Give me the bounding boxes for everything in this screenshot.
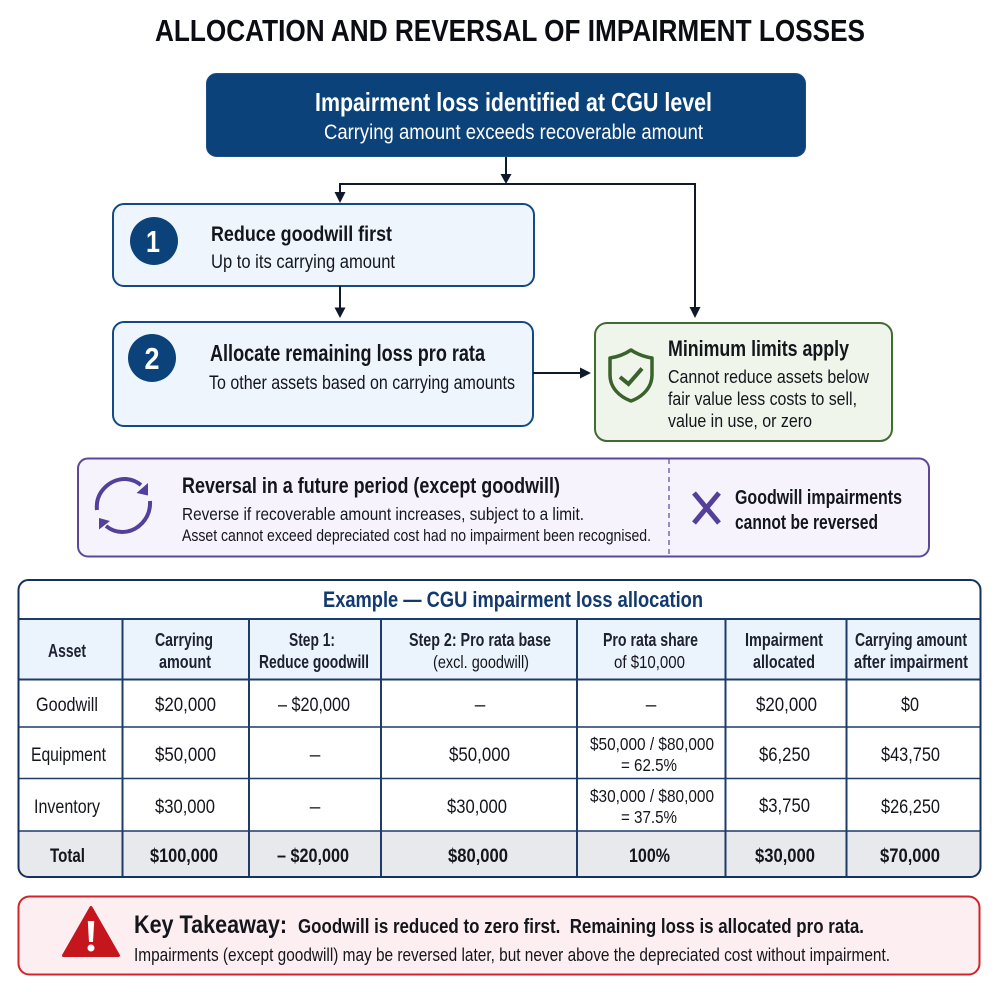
table row: goodwill: $20,000 xyxy=(155,695,216,716)
text: takeaway detail: Impairments (except goodwill) may be reversed later, but never above the depreciated cost without impairment. xyxy=(134,945,890,965)
text: takeaway summary: Goodwill is reduced to zero first. Remaining loss is allocated pro rata. xyxy=(298,915,864,938)
panel: reversal in a future period xyxy=(78,458,929,556)
icon: refresh arrows xyxy=(97,479,150,532)
table row: inventory: $30,000 xyxy=(447,797,507,818)
table row: goodwill: – xyxy=(475,695,486,716)
table header row xyxy=(48,629,968,672)
arrow: step 1 to step 2 xyxy=(334,286,346,318)
table row: total xyxy=(50,846,940,867)
table header row: amount xyxy=(159,651,211,672)
panel: step 2 xyxy=(113,322,533,426)
table header row: Reduce goodwill xyxy=(259,651,369,672)
icon: warning triangle xyxy=(64,908,118,956)
text: goodwill cannot be reversed: cannot be reversed xyxy=(735,511,878,534)
table header row: Step 1: xyxy=(289,629,335,650)
table row: inventory: $26,250 xyxy=(881,797,940,818)
table row: equipment: – xyxy=(310,745,321,766)
icon: number 1: 1 xyxy=(146,224,160,259)
table row: inventory xyxy=(34,786,940,827)
table row: inventory: $3,750 xyxy=(759,796,810,817)
table row: total: – $20,000 xyxy=(277,846,349,867)
heading: reduce goodwill: Reduce goodwill first xyxy=(211,222,392,246)
heading: minimum limits: Minimum limits apply xyxy=(668,336,849,361)
table row: equipment: $50,000 xyxy=(449,745,510,766)
table header row: Pro rata share xyxy=(603,629,698,650)
text: goodwill cannot be reversed xyxy=(735,486,902,534)
icon: cross xyxy=(694,493,719,523)
table row: equipment: $50,000 / $80,000 xyxy=(590,734,714,754)
panel: step 1 xyxy=(113,204,534,286)
table row: goodwill xyxy=(36,695,919,716)
table header row: of $10,000 xyxy=(614,652,685,672)
table row: inventory: = 37.5% xyxy=(621,807,677,827)
text: minimum limits detail: Cannot reduce assets below xyxy=(668,366,870,387)
table row: equipment: $43,750 xyxy=(881,745,940,766)
heading: impairment loss: Impairment loss identified at CGU level xyxy=(315,87,712,117)
panel: key takeaway xyxy=(18,896,980,974)
table row: equipment: Equipment xyxy=(31,745,107,766)
table row: inventory: Inventory xyxy=(34,797,100,818)
table row: equipment: = 62.5% xyxy=(621,755,677,775)
icon: shield xyxy=(610,350,652,401)
text: up to carrying amount: Up to its carrying amount xyxy=(211,252,396,273)
table header row: after impairment xyxy=(854,651,968,672)
table row: inventory: $30,000 / $80,000 xyxy=(590,786,714,806)
panel: example table xyxy=(18,580,981,877)
table row: total: $100,000 xyxy=(150,846,218,867)
table row: total: $30,000 xyxy=(755,846,815,867)
text: reversal detail xyxy=(182,504,651,545)
table row: inventory: $30,000 xyxy=(155,797,215,818)
text: reversal detail: Reverse if recoverable amount increases, subject to a limit. xyxy=(182,504,584,524)
table row: equipment: $50,000 xyxy=(155,745,216,766)
text: to other assets: To other assets based on carrying amounts xyxy=(209,373,515,394)
icon: number 2: 2 xyxy=(144,341,160,376)
subheading: carrying amount: Carrying amount exceeds recoverable amount xyxy=(324,121,703,144)
text: minimum limits detail: fair value less costs to sell, xyxy=(668,388,857,409)
table row: goodwill: $20,000 xyxy=(756,695,817,716)
table row: total: 100% xyxy=(629,846,670,867)
table row: goodwill: – $20,000 xyxy=(278,695,350,716)
arrow: step 2 to minimum limits xyxy=(533,368,591,378)
table row: equipment: $6,250 xyxy=(759,745,810,766)
table header row: Impairment xyxy=(745,629,823,650)
table row: total: $70,000 xyxy=(880,846,940,867)
arrow: split from top box xyxy=(334,157,700,318)
heading: key takeaway: Key Takeaway: xyxy=(134,911,287,939)
table row: equipment xyxy=(31,734,940,775)
heading: allocate remaining loss: Allocate remaining loss pro rata xyxy=(210,340,485,366)
table row: goodwill: $0 xyxy=(901,695,919,716)
text: minimum limits detail xyxy=(668,366,870,431)
table row: total: $80,000 xyxy=(448,846,508,867)
panel: impairment loss identified xyxy=(206,74,806,156)
table header row: Step 2: Pro rata base xyxy=(409,629,551,650)
table row: inventory: – xyxy=(310,797,321,818)
table header row: Carrying xyxy=(155,629,213,650)
text: reversal detail: Asset cannot exceed depreciated cost had no impairment been recognised. xyxy=(182,526,651,545)
table header row: allocated xyxy=(753,651,815,672)
table row: total: Total xyxy=(50,846,85,867)
table header row: (excl. goodwill) xyxy=(433,652,529,672)
heading: example: Example — CGU impairment loss allocation xyxy=(323,587,703,612)
heading: reversal: Reversal in a future period (except goodwill) xyxy=(182,473,560,498)
text: goodwill cannot be reversed: Goodwill impairments xyxy=(735,486,902,509)
table row: goodwill: – xyxy=(646,695,657,716)
table header row: Asset xyxy=(48,640,86,661)
panel: minimum limits xyxy=(595,323,892,441)
table row: goodwill: Goodwill xyxy=(36,695,98,716)
title: ALLOCATION AND REVERSAL OF IMPAIRMENT LOSSES xyxy=(155,13,865,48)
icon: number 1 xyxy=(130,217,178,265)
text: minimum limits detail: value in use, or zero xyxy=(668,410,812,431)
icon: number 2 xyxy=(128,334,176,382)
